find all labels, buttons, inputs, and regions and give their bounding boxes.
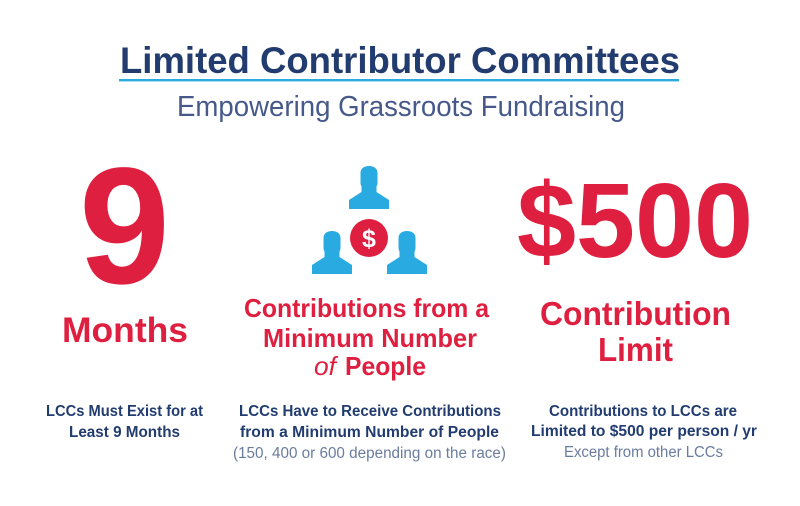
column: months [46,134,203,441]
description: minimum number [233,403,506,462]
description: months [46,403,203,441]
heading: minimum number of people: People [345,351,426,381]
column: minimum contributors [233,166,506,462]
heading: minimum number of people: Minimum Number [263,323,477,353]
big number $500: $500 [517,162,753,280]
icon: three people around a dollar coin: $ [362,225,376,253]
description: contribution limit: Contributions to LCCs are [549,403,737,420]
description: contribution limit: Except from other LCCs [564,444,723,461]
heading: contribution limit [540,295,731,368]
big number 9: 9 [79,134,170,319]
description: minimum number: LCCs Have to Receive Contributions [239,403,501,420]
description: minimum number: (150, 400 or 600 depending on the race) [233,445,506,462]
heading: minimum number of people [244,293,490,381]
subtitle: Empowering Grassroots Fundraising [177,91,625,123]
description: months: LCCs Must Exist for at [46,403,203,420]
description: contribution limit: Limited to $500 per person / yr [531,423,757,440]
description: contribution limit [531,403,757,461]
description: minimum number: from a Minimum Number of People [240,424,499,441]
heading: minimum number of people: Contributions from a [244,293,490,323]
heading: contribution limit: Contribution [540,295,731,332]
heading: minimum number of people: of [314,351,339,381]
column: contribution limit [517,162,757,461]
title: Limited Contributor Committees [120,40,680,81]
heading: months: Months [62,311,188,350]
icon: three people around a dollar coin [312,166,427,274]
heading: contribution limit: Limit [598,331,673,368]
description: months: Least 9 Months [69,424,180,441]
